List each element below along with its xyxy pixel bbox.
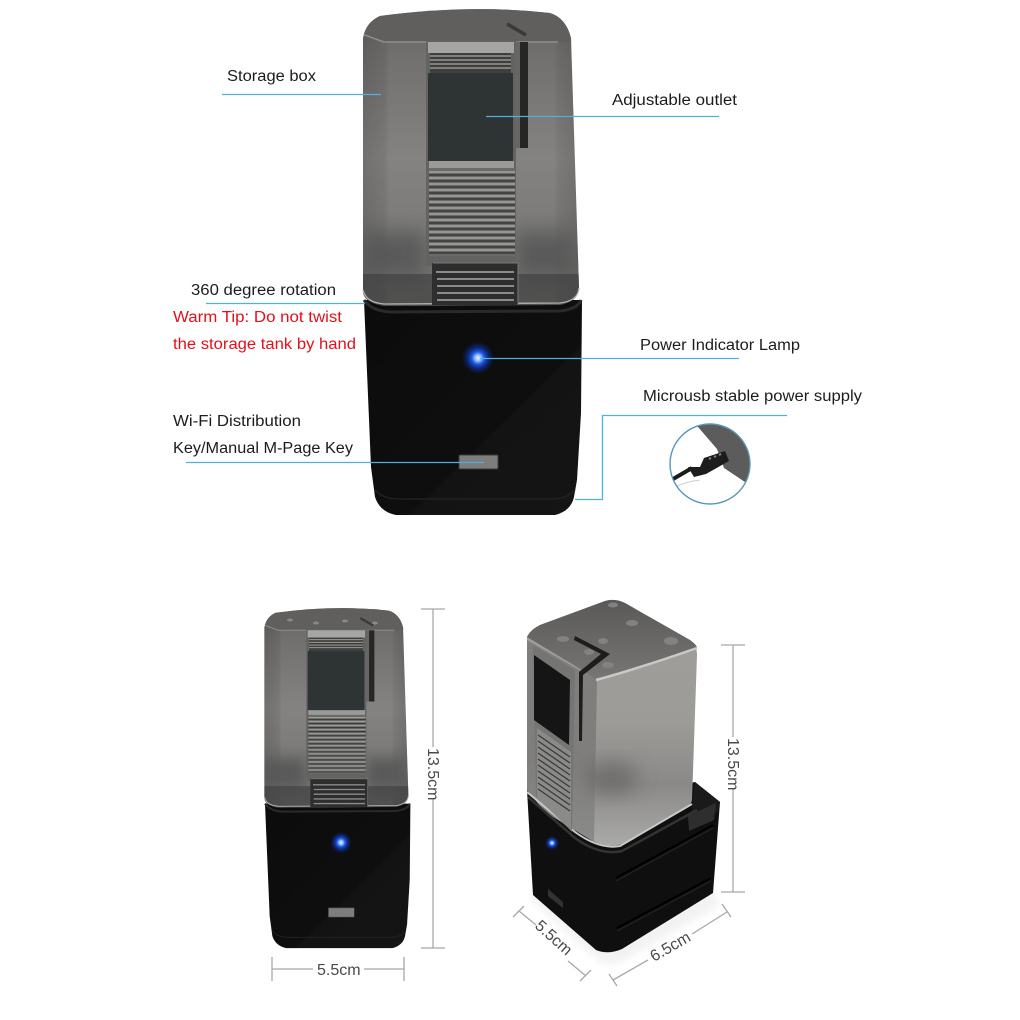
label: Wi-Fi distribution key: Wi-Fi Distribution xyxy=(173,413,301,430)
warm tip text: Warm Tip: Do not twist xyxy=(173,309,343,326)
label: Storage box: Storage box xyxy=(227,68,316,85)
icon: micro USB inset xyxy=(669,423,751,505)
label: Wi-Fi distribution key xyxy=(173,413,484,462)
label: Adjustable outlet: Adjustable outlet xyxy=(612,92,738,109)
label: Microusb stable power supply xyxy=(575,388,862,500)
dimension: angled width 6.5cm: 6.5cm xyxy=(648,929,694,965)
dimension: front width 5.5cm xyxy=(272,957,404,981)
dimension: front height 13.5cm xyxy=(421,609,445,948)
label: Microusb stable power supply: Microusb stable power supply xyxy=(643,388,862,405)
warm tip text: the storage tank by hand xyxy=(173,336,356,353)
dimension: angled depth 5.5cm: 5.5cm xyxy=(531,917,575,959)
dimension: angled width 6.5cm xyxy=(609,904,731,986)
warm tip text xyxy=(173,309,356,353)
front view device xyxy=(259,602,416,948)
main device photo xyxy=(355,0,590,515)
label: Power Indicator Lamp: Power Indicator Lamp xyxy=(640,337,800,354)
angled view device xyxy=(527,600,720,964)
label: Wi-Fi distribution key: Key/Manual M-Page Key xyxy=(173,440,353,457)
label: 360 degree rotation: 360 degree rotation xyxy=(191,282,336,299)
dimension: angled depth 5.5cm xyxy=(513,906,591,981)
dimension: angled height 13.5cm: 13.5cm xyxy=(724,738,741,790)
dimension: front width 5.5cm: 5.5cm xyxy=(317,962,361,979)
dimension: front height 13.5cm: 13.5cm xyxy=(424,748,441,800)
dimension: angled height 13.5cm xyxy=(721,645,745,892)
